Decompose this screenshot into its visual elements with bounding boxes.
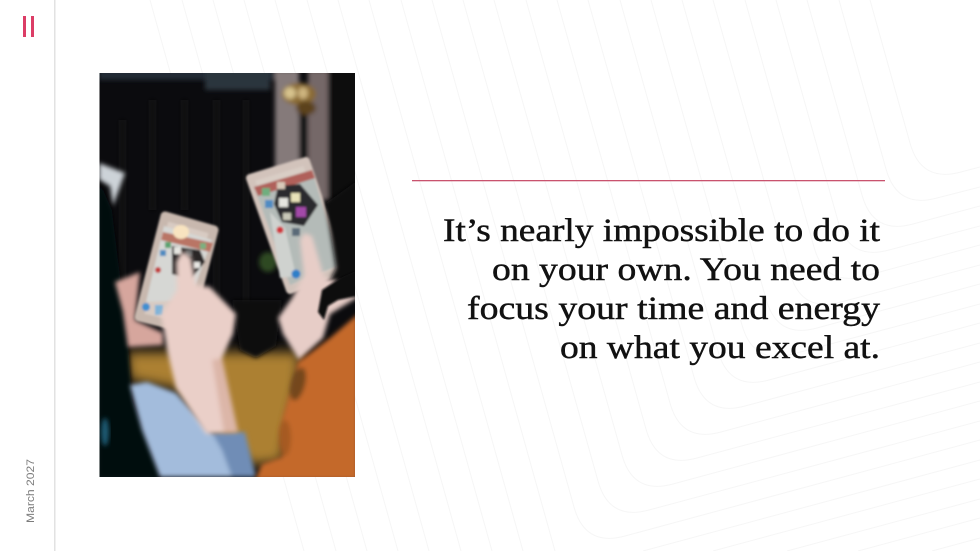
date label: March 2027 [25,459,37,523]
orange sweater [255,314,358,480]
radiator background [100,73,333,274]
left forearm and finger [161,251,238,434]
quote text: It’s nearly impossible to do it [443,213,880,249]
dark hair over right phone [322,198,348,280]
divider rule [412,180,885,181]
sidebar divider [54,0,56,551]
photo: two people using smartphones [99,68,358,480]
right phone [250,161,343,290]
quote text: on your own. You need to [492,252,880,288]
left hand behind phone [115,272,163,347]
icon: pause-style logo mark [23,16,34,37]
quote text [443,213,881,366]
blue shirt [130,382,256,477]
quote text: focus your time and energy [467,291,881,327]
wooden floor [126,352,300,465]
left phone [139,216,214,329]
person at left: hair [99,180,160,477]
dark hair tuft [316,278,355,321]
right hand and finger [278,233,358,360]
white object at left edge [99,163,125,206]
quote text: on what you excel at. [560,330,880,366]
